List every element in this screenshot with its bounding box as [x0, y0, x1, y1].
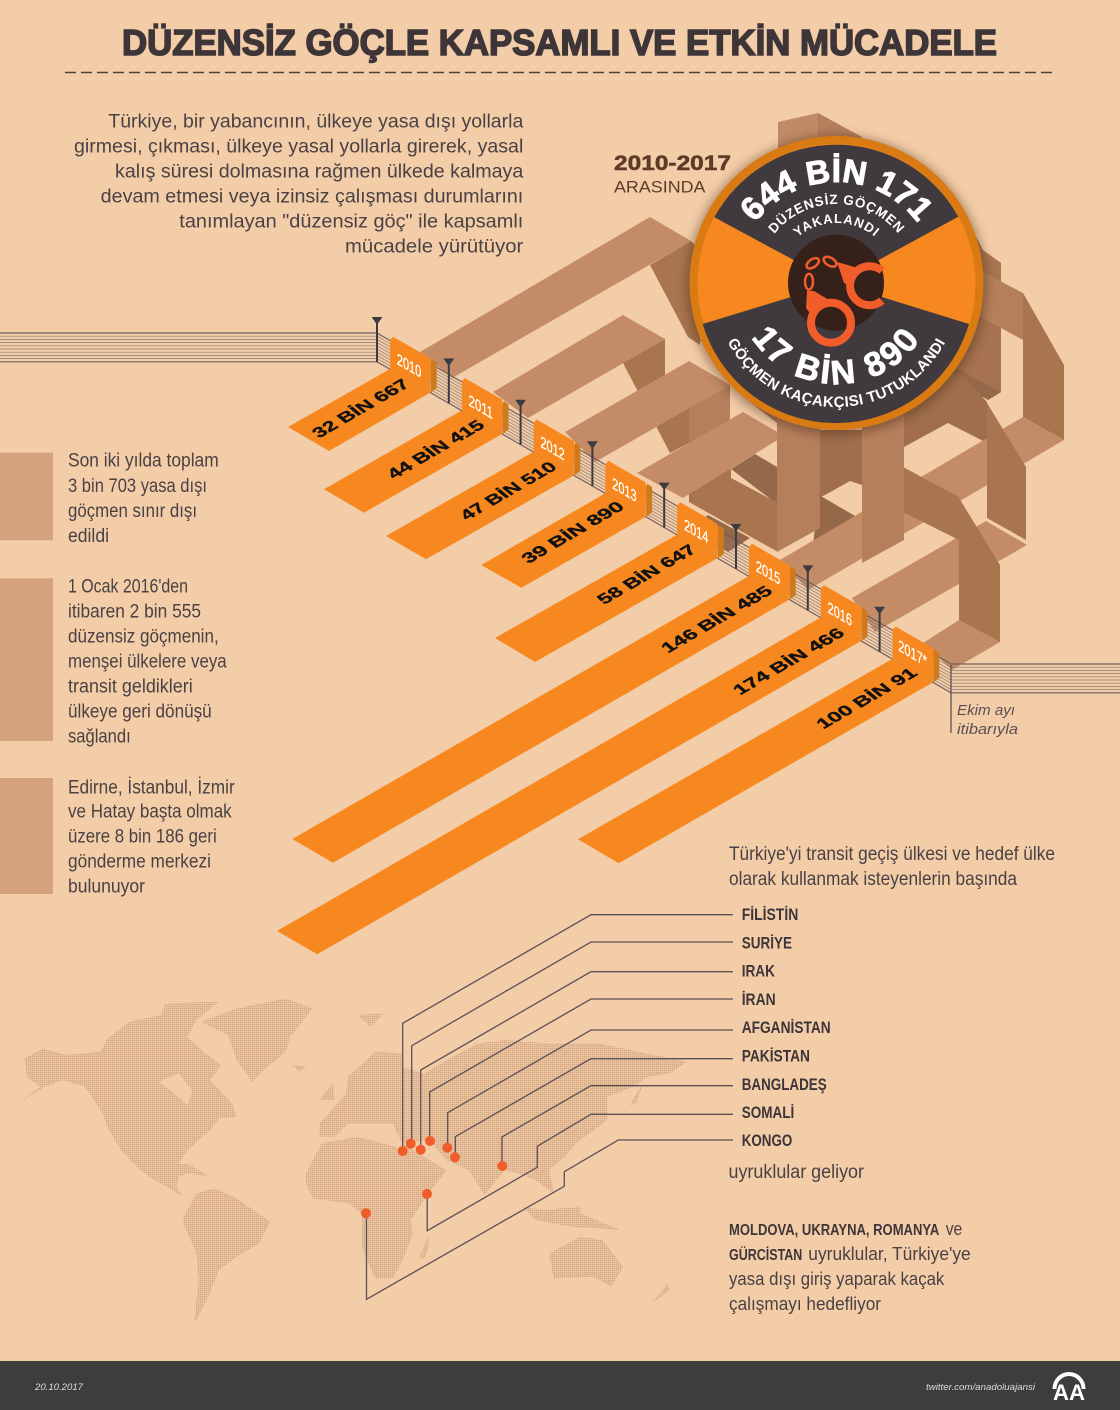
- bottom paragraph: çalışmayı hedefliyor: [729, 1293, 881, 1314]
- disc texts: DÜZENSİZ GÖÇMEN: [768, 193, 904, 234]
- leader lines: [366, 915, 733, 1299]
- side panel 2: düzensiz göçmenin,: [68, 627, 219, 648]
- disc texts: GÖÇMEN KAÇAKÇISI TUTUKLANDI: [729, 338, 945, 410]
- bar values: 32 BİN 667: [307, 376, 414, 441]
- band 2017: [923, 620, 1000, 670]
- note: Ekim ayı itibarıyla: [957, 702, 1018, 738]
- bottom paragraph: MOLDOVA, UKRAYNA, ROMANYA: [729, 1222, 940, 1239]
- year flag 2015: [749, 544, 796, 600]
- year flag 2012: [534, 420, 580, 476]
- band 2013: [637, 412, 784, 498]
- year flag 2017: 2017*: [898, 638, 927, 671]
- map markers: [361, 1136, 507, 1218]
- year flag 2011: 2011: [469, 392, 493, 423]
- period heading: ARASINDA: [614, 177, 706, 196]
- bar values: 146 BİN 485: [656, 582, 777, 656]
- world map: [20, 998, 687, 1320]
- intro text: Türkiye, bir yabancının, ülkeye yasa dışı yollarla: [108, 110, 523, 132]
- country list: SOMALİ: [742, 1104, 794, 1122]
- side panel 1: göçmen sınır dışı: [68, 501, 197, 522]
- year flag 2016: [821, 585, 868, 641]
- side panel 2: sağlandı: [68, 726, 131, 747]
- side panel 3: [0, 777, 235, 898]
- side panel 1: Son iki yılda toplam: [68, 451, 219, 472]
- side panel 3: bulunuyor: [68, 877, 146, 898]
- disc texts: [729, 153, 945, 410]
- disc: [682, 129, 991, 439]
- country list: IRAK: [742, 963, 775, 981]
- side panel 3: Edirne, İstanbul, İzmir: [68, 777, 235, 798]
- top sector: [714, 145, 958, 283]
- fence posts: [374, 318, 951, 733]
- year flag 2016: 2016: [828, 599, 852, 630]
- note: Ekim ayı itibarıyla: Ekim ayı: [957, 702, 1015, 719]
- country list: KONGO: [742, 1132, 792, 1150]
- side panel 2: [0, 577, 227, 747]
- bar values: 47 BİN 510: [455, 458, 561, 523]
- bar values: 44 BİN 415: [382, 416, 489, 482]
- isometric brown structure: [420, 113, 1064, 670]
- disc texts: YAKALANDI: [792, 214, 880, 236]
- footer: [0, 1361, 1120, 1410]
- origin heading: olarak kullanmak isteyenlerin başında: [729, 869, 1017, 890]
- band 2010: [420, 217, 691, 378]
- bar values: 39 BİN 890: [517, 498, 628, 566]
- side panel 1: 3 bin 703 yasa dışı: [68, 476, 207, 497]
- country list: AFGANİSTAN: [742, 1019, 831, 1037]
- year flag 2013: 2013: [612, 475, 637, 506]
- year flag 2014: 2014: [684, 517, 708, 548]
- bar values: 58 BİN 647: [592, 541, 701, 607]
- intro text: mücadele yürütüyor: [345, 235, 524, 257]
- band 2016: [852, 521, 1027, 632]
- country list: FİLİSTİN: [742, 906, 798, 924]
- fence lines: [0, 333, 1120, 693]
- period heading: 2010-2017: [614, 152, 731, 175]
- band 2015: [780, 417, 1064, 590]
- disc texts: 644 BİN 171: [742, 153, 932, 223]
- year flag 2014: [677, 502, 724, 558]
- side panel 2: 1 Ocak 2016'den: [68, 577, 188, 598]
- bottom paragraph: [729, 1218, 971, 1314]
- footer: twitter.com/anadoluajansi: [926, 1382, 1036, 1393]
- side panel 2: itibaren 2 bin 555: [68, 602, 201, 623]
- bottom paragraph: uyruklular, Türkiye'ye: [808, 1243, 971, 1264]
- bar values: [307, 376, 922, 732]
- year flag 2015: 2015: [756, 558, 780, 589]
- bottom sector: [703, 283, 969, 423]
- icon: AA logo: AA: [1053, 1380, 1085, 1405]
- nationalities note: uyruklular geliyor: [728, 1162, 865, 1183]
- year flag 2010: 2010: [397, 351, 421, 382]
- bottom paragraph: yasa dışı giriş yaparak kaçak: [729, 1268, 945, 1289]
- side panel 1: [0, 451, 219, 547]
- disc texts: 17 BİN 890: [752, 326, 917, 385]
- year flag 2013: [605, 461, 652, 517]
- orange bars: [277, 369, 933, 954]
- bar values: 174 BİN 466: [728, 624, 849, 698]
- country list: SURİYE: [742, 935, 792, 953]
- year flag 2017: [893, 626, 939, 682]
- band 2012: [565, 361, 730, 462]
- side panel 3: üzere 8 bin 186 geri: [68, 827, 217, 848]
- year flag 2011: [462, 378, 508, 434]
- intro text: kalış süresi dolmasına rağmen ülkede kalmaya: [115, 160, 523, 182]
- country list: [742, 906, 831, 1150]
- side panel 2: ülkeye geri dönüşü: [68, 701, 212, 722]
- side panel 3: ve Hatay başta olmak: [68, 802, 232, 823]
- bottom paragraph: ve: [946, 1218, 962, 1239]
- note: Ekim ayı itibarıyla: itibarıyla: [957, 721, 1018, 738]
- side panel 3: gönderme merkezi: [68, 851, 211, 872]
- side panel 2: transit geldikleri: [68, 676, 193, 697]
- side panel 2: menşei ülkelere veya: [68, 651, 227, 672]
- band 2011: [493, 315, 665, 418]
- bottom paragraph: GÜRCİSTAN: [729, 1245, 802, 1264]
- intro text: girmesi, çıkması, ülkeye yasal yollarla girerek, yasal: [74, 135, 523, 157]
- intro text: [74, 110, 524, 257]
- year flag 2010: [390, 337, 437, 393]
- handcuffs icon: [788, 235, 884, 343]
- side panel 1: edildi: [68, 526, 109, 547]
- bar values: 100 BİN 91: [811, 664, 922, 732]
- intro text: tanımlayan "düzensiz göç" ile kapsamlı: [179, 210, 523, 232]
- origin heading: [729, 844, 1055, 890]
- country list: İRAN: [742, 991, 776, 1009]
- period heading: [614, 152, 731, 196]
- title: DÜZENSİZ GÖÇLE KAPSAMLI VE ETKİN MÜCADELE: [122, 22, 997, 63]
- country list: PAKİSTAN: [742, 1048, 810, 1066]
- footer: 20.10.2017: [34, 1382, 84, 1393]
- origin heading: Türkiye'yi transit geçiş ülkesi ve hedef ülke: [729, 844, 1055, 865]
- country list: BANGLADEŞ: [742, 1076, 827, 1094]
- year flag 2012: 2012: [540, 434, 565, 465]
- intro text: devam etmesi veya izinsiz çalışması durumlarını: [101, 185, 523, 207]
